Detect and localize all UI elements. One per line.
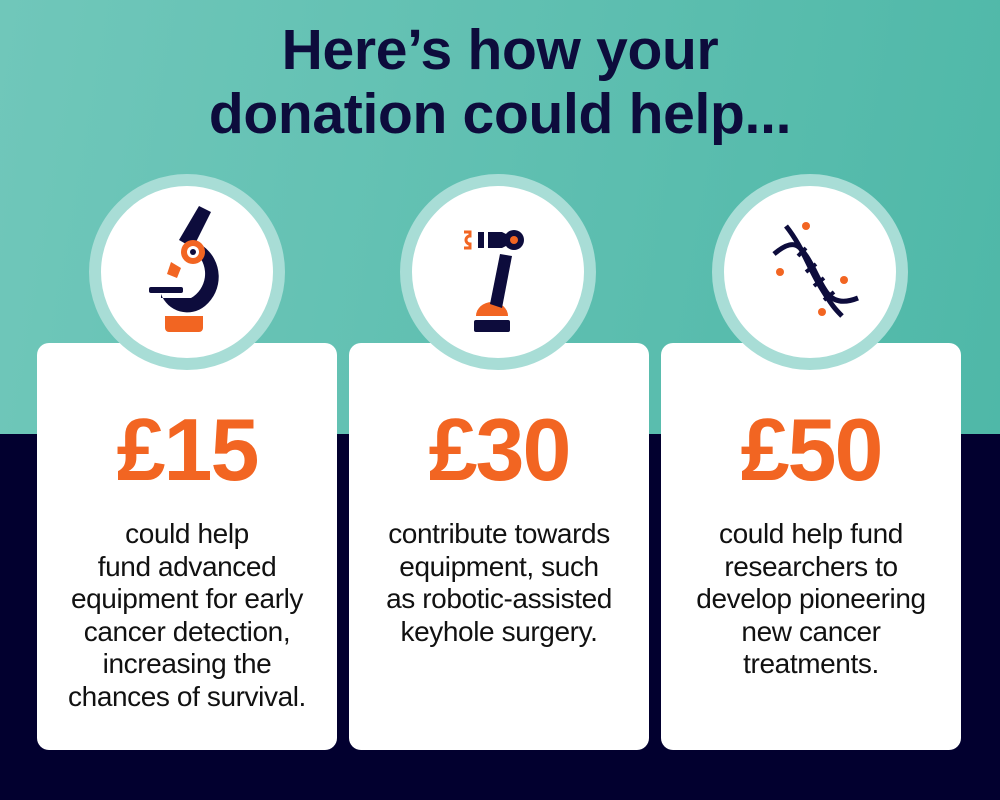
icon: microscope xyxy=(89,174,285,370)
card: £50: researchers to xyxy=(724,551,898,582)
icon: robotic arm xyxy=(400,174,596,370)
card: £15: chances of survival. xyxy=(68,681,306,712)
card: £30: equipment, such xyxy=(399,551,599,582)
card: £50: new cancer xyxy=(741,616,881,647)
card: £50 xyxy=(661,343,961,750)
card: £30: as robotic-assisted xyxy=(386,583,612,614)
card: £50: develop pioneering xyxy=(696,583,926,614)
card: £15: fund advanced xyxy=(98,551,276,582)
card: £30: keyhole surgery. xyxy=(401,616,597,647)
card: £15: could help xyxy=(125,518,249,549)
card: £30 xyxy=(349,343,649,750)
card: £15: £15 xyxy=(117,400,257,499)
card: £30: £30 xyxy=(429,400,569,499)
card: £50: could help fund xyxy=(719,518,903,549)
icon: DNA xyxy=(712,174,908,370)
title: donation could help... xyxy=(209,82,791,146)
card: £50: £50 xyxy=(741,400,881,499)
card: £30: contribute towards xyxy=(388,518,610,549)
title: Here’s how your xyxy=(282,18,718,82)
card: £15: equipment for early xyxy=(71,583,303,614)
title xyxy=(209,18,791,146)
card: £15: cancer detection, xyxy=(84,616,290,647)
card: £15: increasing the xyxy=(103,648,271,679)
card: £50: treatments. xyxy=(743,648,879,679)
card: £15 xyxy=(37,343,337,750)
